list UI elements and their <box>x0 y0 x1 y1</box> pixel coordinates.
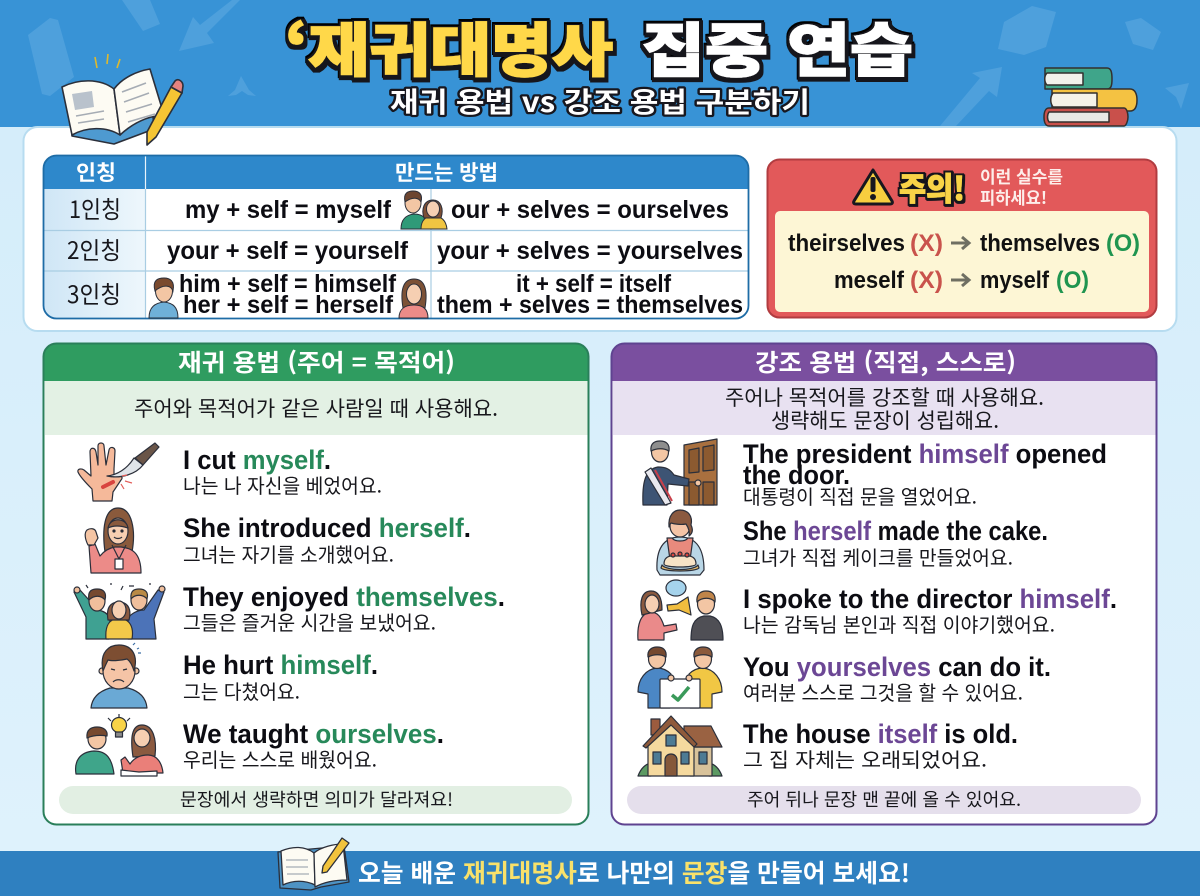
sentence: I spoke to the director himself <box>743 584 1117 638</box>
sentence: I cut myself <box>183 445 382 499</box>
sentence: You yourselves can do it <box>743 652 1051 706</box>
reflexive tip pill <box>59 786 572 814</box>
correction: themselves: theirselves <box>788 230 905 257</box>
sentence: I spoke to the director himself: 나는 감독님 본인과 직접 이야기했어요. <box>743 609 1055 638</box>
table header: 인칭: 인칭 <box>76 157 116 187</box>
row: 3인칭: him + self = himself <box>179 270 397 298</box>
sentence: I cut myself: 나는 나 자신을 베었어요. <box>183 470 382 499</box>
emphatic tip pill <box>627 786 1141 814</box>
icon: open book with pencil <box>62 54 183 145</box>
row: 1인칭: our + selves = ourselves <box>451 196 729 224</box>
sentence: The president himself opened the door <box>743 439 1107 510</box>
sentence: I cut myself: I cut myself. <box>183 445 331 475</box>
correction: myself: (O) <box>1056 267 1089 294</box>
emphatic description: 주어나 목적어를 강조할 때 사용해요. <box>725 382 1044 412</box>
sentence: They enjoyed themselves: 그들은 즐거운 시간을 보냈어요. <box>183 607 436 636</box>
sentence: He hurt himself <box>183 650 378 705</box>
main title <box>285 4 913 88</box>
sentence: You yourselves can do it: You yourselves can do it. <box>743 652 1051 682</box>
sentence: The house itself is old <box>743 719 1018 773</box>
sentence: She herself made the cake: 그녀가 직접 케이크를 만들었어요. <box>743 542 1013 571</box>
row: 2인칭 <box>67 231 743 266</box>
icon: woman with cake <box>657 510 704 575</box>
correction: themselves <box>788 230 1140 257</box>
correction: themselves: themselves <box>980 230 1100 257</box>
sentence: The president himself opened the door: 대통령이 직접 문을 열었어요. <box>743 481 977 510</box>
row: 2인칭: 2인칭 <box>67 231 121 266</box>
sentence: She herself made the cake: She herself made the cake. <box>743 516 1048 546</box>
sentence: She introduced herself: 그녀는 자기를 소개했어요. <box>183 539 394 568</box>
sentence: We taught ourselves: We taught ourselves. <box>183 719 444 749</box>
icon: stack of books <box>1044 68 1137 126</box>
icon: two people with check sign <box>638 647 722 708</box>
sentence: The president himself opened the door: the door. <box>743 460 850 490</box>
row: 3인칭: it + self = itself <box>516 270 672 298</box>
reflexive heading: 재귀 용법 (주어 = 목적어) <box>178 343 455 378</box>
emphatic description: 생략해도 문장이 성립해요. <box>771 405 999 435</box>
sentence: She introduced herself <box>183 513 471 568</box>
icon: woman with megaphone and director <box>638 580 723 640</box>
sentence: I spoke to the director himself: I spoke to the director himself. <box>743 584 1117 614</box>
main title: ‘재귀대명사 <box>285 4 613 88</box>
row: 3인칭: 3인칭 <box>67 275 121 310</box>
sentence: We taught ourselves: 우리는 스스로 배웠어요. <box>183 744 377 773</box>
icon: warning triangle <box>854 170 892 204</box>
correction: myself <box>834 267 1089 294</box>
row: 1인칭: my + self = myself <box>185 196 392 224</box>
caution note <box>980 163 1063 209</box>
caution heading: 주의! <box>899 164 965 210</box>
emphatic tip pill: 주어 뒤나 문장 맨 끝에 올 수 있어요. <box>747 786 1021 812</box>
icon: two students and light bulb <box>76 714 163 776</box>
row: 3인칭: her + self = herself <box>183 291 394 319</box>
table header: 만드는 방법: 만드는 방법 <box>395 157 498 187</box>
panel: caution <box>768 160 1156 318</box>
footer message: 오늘 배운 재귀대명사로 나만의 문장을 만들어 보세요! <box>358 854 910 890</box>
sentence: The president himself opened the door: The president himself opened <box>743 439 1107 469</box>
correction: myself: myself <box>980 267 1050 294</box>
sentence: You yourselves can do it: 여러분 스스로 그것을 할 수 있어요. <box>743 677 1023 706</box>
subtitle: 재귀 용법 vs 강조 용법 구분하기 <box>390 81 810 121</box>
correction: myself: (X) <box>910 267 943 294</box>
panel: emphatic use <box>612 343 1157 824</box>
correction: myself: meself <box>834 267 905 294</box>
icon: girl <box>399 279 428 318</box>
sentence: They enjoyed themselves: They enjoyed themselves. <box>183 582 505 612</box>
emphatic description <box>725 382 1044 435</box>
row: 2인칭: your + self = yourself <box>167 237 409 265</box>
caution note: 피하세요! <box>980 184 1047 209</box>
sentence: The house itself is old: The house itself is old. <box>743 719 1018 749</box>
correction: themselves: (X) <box>910 230 943 257</box>
icon: footer book and pencil <box>278 838 349 890</box>
row: 1인칭 <box>69 190 729 225</box>
table: how to make reflexive pronouns <box>44 156 748 319</box>
row: 3인칭: them + selves = themselves <box>437 291 743 319</box>
sentence: They enjoyed themselves <box>183 582 505 636</box>
icon: woman waving <box>85 508 141 573</box>
icon: hurt boy <box>91 643 147 708</box>
top white panel <box>24 127 1176 331</box>
emphatic heading: 강조 용법 (직접, 스스로) <box>755 343 1016 378</box>
sentence: We taught ourselves <box>183 719 444 773</box>
icon: couple <box>401 191 447 229</box>
caution note: 이런 실수를 <box>980 163 1063 188</box>
icon: house <box>638 716 722 776</box>
sentence: He hurt himself: He hurt himself. <box>183 650 378 680</box>
row: 2인칭: your + selves = yourselves <box>437 237 743 265</box>
icon: boy <box>149 278 178 318</box>
sentence: The house itself is old: 그 집 자체는 오래되었어요. <box>743 744 987 773</box>
icon: hand and knife <box>78 443 159 501</box>
icon: three cheering friends <box>74 584 165 639</box>
row: 1인칭: 1인칭 <box>69 190 121 225</box>
reflexive description: 주어와 목적어가 같은 사람일 때 사용해요. <box>134 393 498 423</box>
footer banner <box>0 838 1200 896</box>
correction: themselves: (O) <box>1106 230 1140 257</box>
sentence: She introduced herself: She introduced herself. <box>183 513 471 543</box>
panel: reflexive use <box>44 343 589 824</box>
main title: 집중 연습 <box>642 4 913 88</box>
header banner <box>0 0 1200 127</box>
sentence: She herself made the cake <box>743 516 1048 571</box>
row: 3인칭 <box>67 270 743 319</box>
icon: president opening door <box>643 439 717 505</box>
sentence: He hurt himself: 그는 다쳤어요. <box>183 676 300 705</box>
reflexive tip pill: 문장에서 생략하면 의미가 달라져요! <box>180 786 453 812</box>
